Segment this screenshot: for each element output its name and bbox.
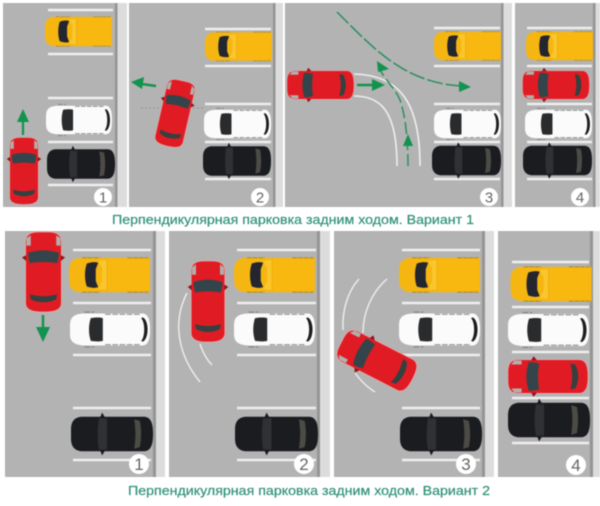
step numbers: 3 [461, 455, 471, 474]
step numbers: 4 [571, 456, 581, 475]
step numbers: 1 [99, 190, 107, 206]
step numbers: 4 [576, 190, 584, 206]
step numbers: 3 [485, 190, 493, 206]
step numbers [94, 188, 589, 475]
step 1.2: parked cars and red car turning [131, 32, 272, 178]
step 2.2: red car with white curves [179, 258, 318, 454]
step numbers: 1 [134, 455, 144, 474]
step 1.3: trajectory diagram [287, 12, 501, 178]
step 2.3: red car angled with white curves [332, 258, 482, 454]
step numbers: 2 [299, 455, 309, 474]
step 2.1: parked cars and reversing red car [23, 232, 153, 454]
step 2.4: parked result [508, 267, 592, 440]
step numbers: 2 [256, 190, 264, 206]
panel: variant 1 background [3, 3, 600, 207]
caption: variant 2: Перпендикулярная парковка задним ходом. Вариант 2 [128, 483, 490, 498]
step 1.4: parked result [522, 32, 593, 178]
caption: variant 1: Перпендикулярная парковка задним ходом. Вариант 1 [112, 212, 474, 227]
panel: variant 2 background [5, 231, 600, 477]
step 1.1: parked cars and red car with arrow [7, 17, 115, 204]
